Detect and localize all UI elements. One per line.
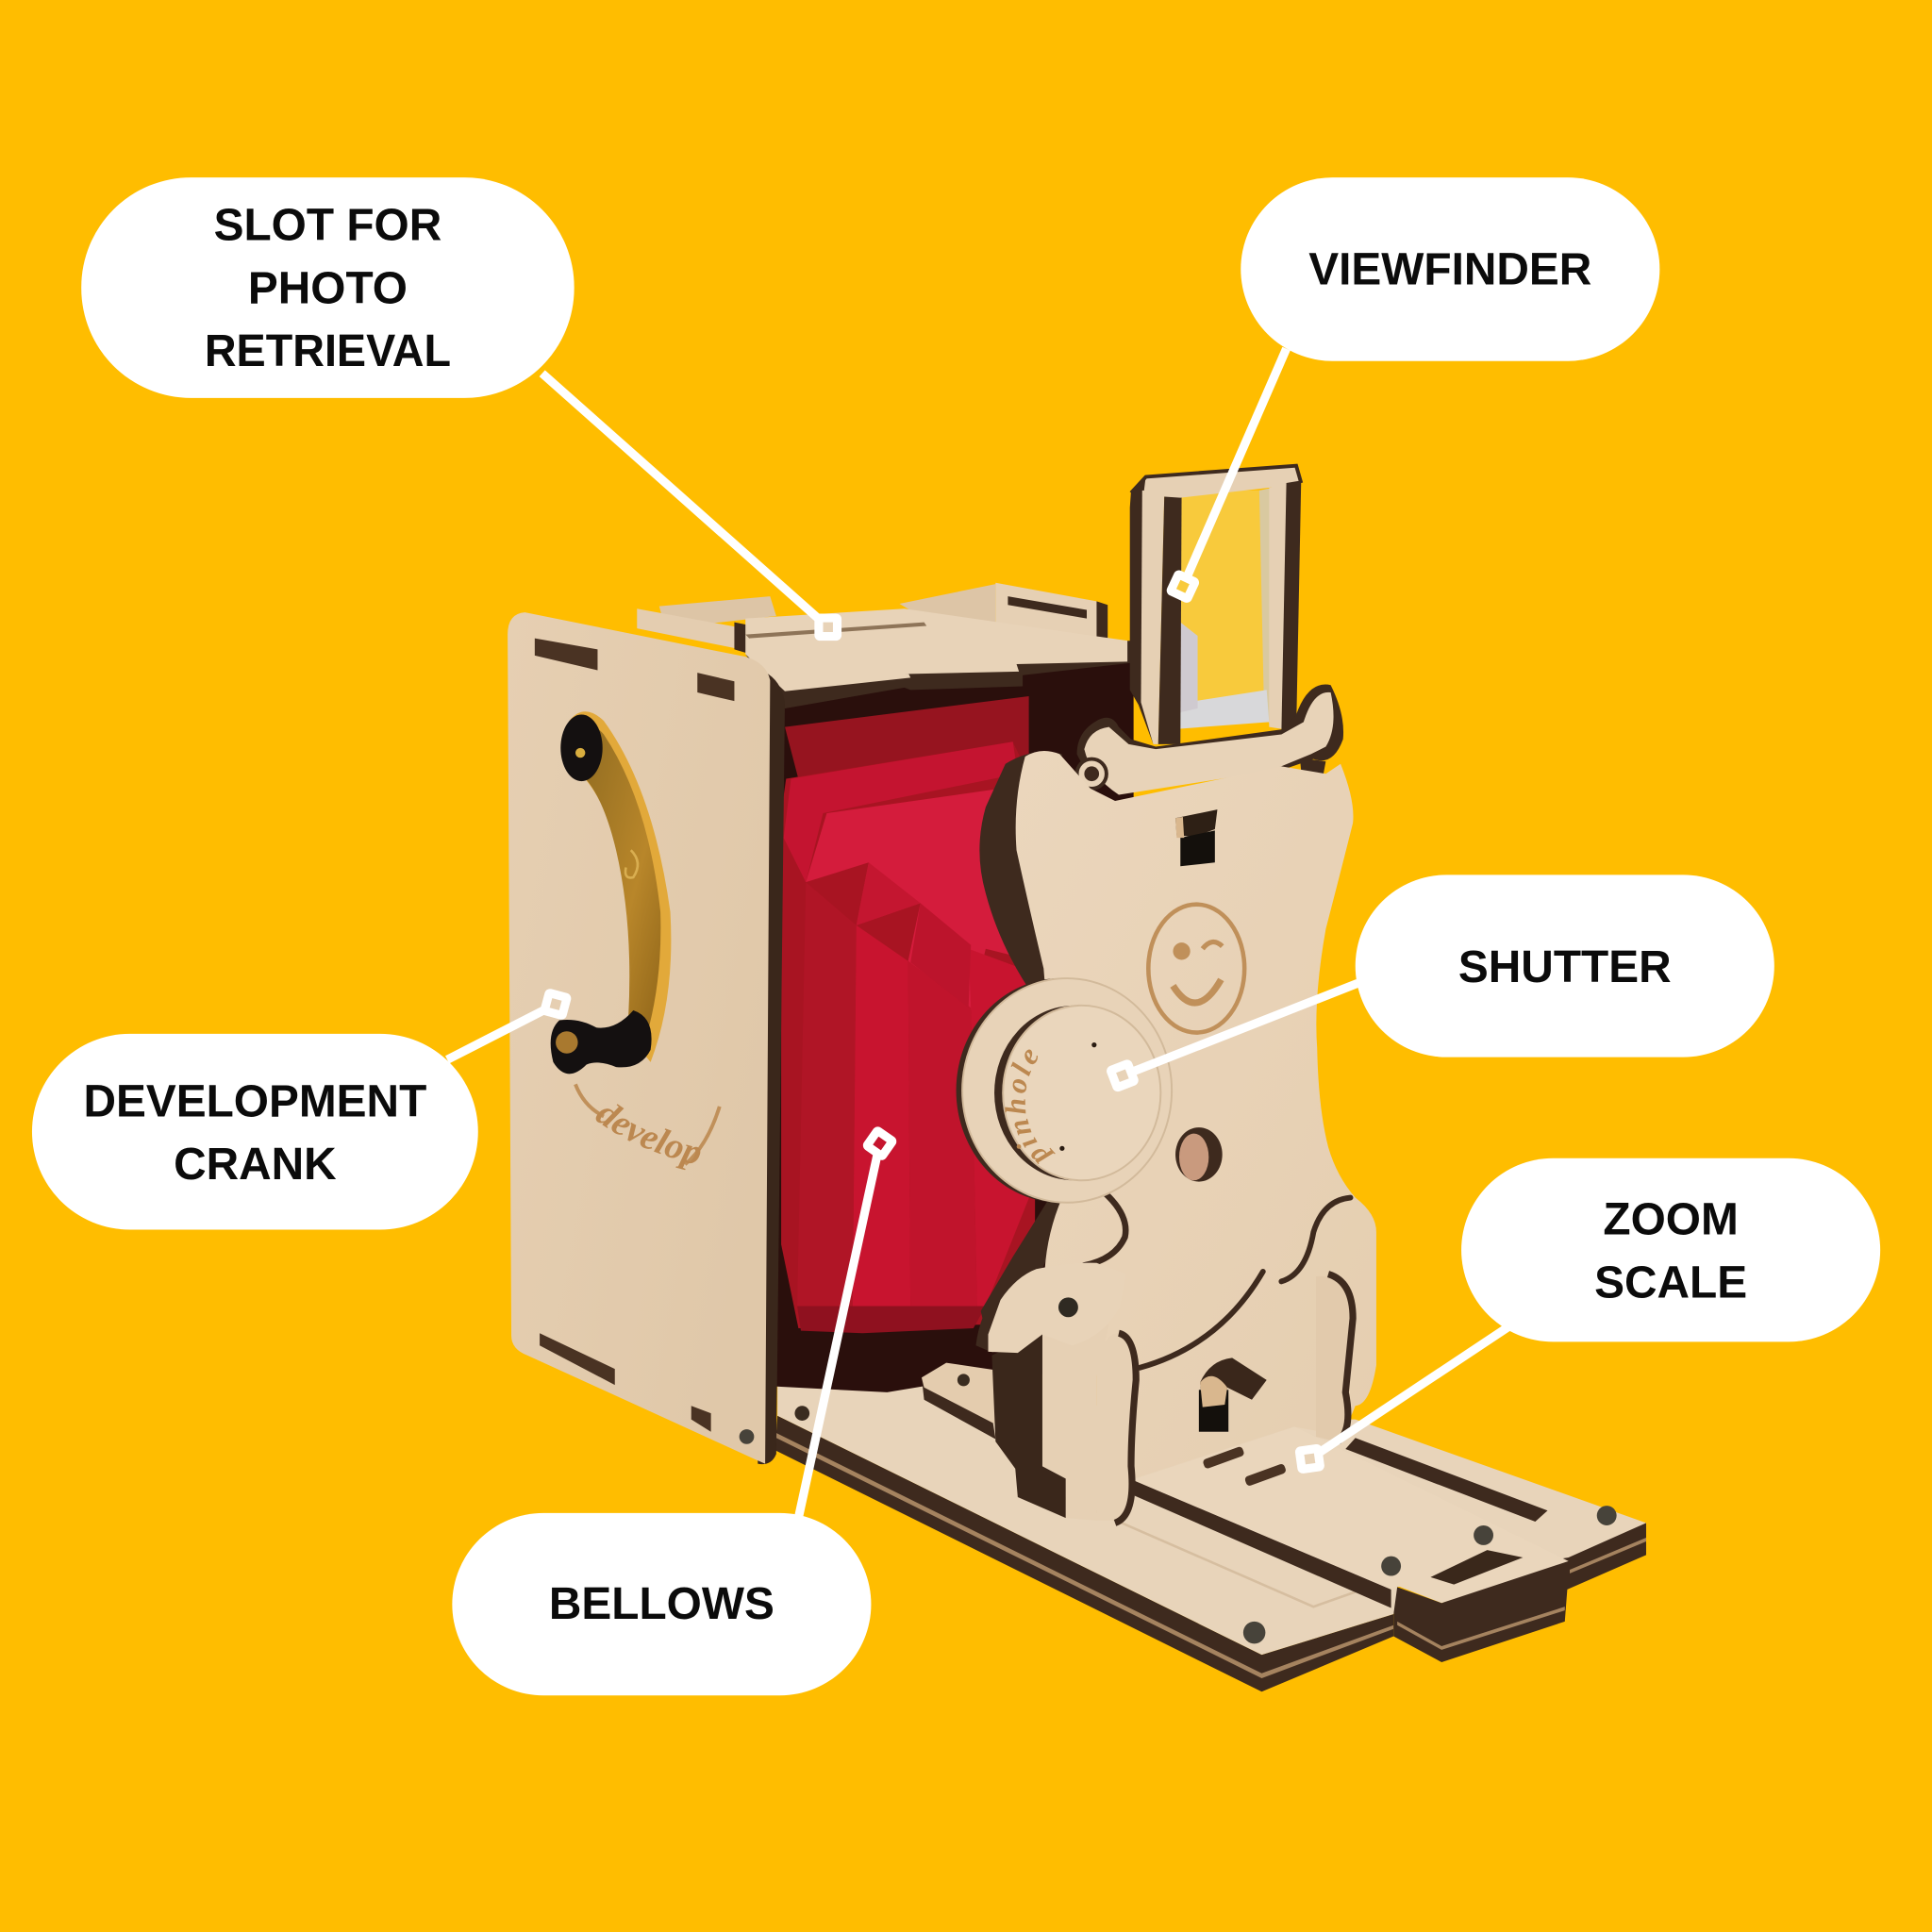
viewfinder top bar (1143, 466, 1301, 498)
smiley engraving (1148, 905, 1244, 1033)
viewfinder right post (1269, 483, 1289, 729)
shutter window slot (1175, 809, 1217, 866)
bellows (781, 696, 1035, 1333)
callout: slot for photo retrieval (81, 177, 838, 637)
callout: development crank: CRANK (174, 1140, 337, 1190)
camera illustration (508, 464, 1646, 1692)
callout: bellows (452, 1130, 892, 1695)
bone crossbar (1077, 685, 1343, 838)
lower body pieces (991, 1324, 1109, 1521)
pinhole dial (957, 977, 1173, 1204)
base board (775, 1356, 1646, 1691)
engraved develop mark (574, 1083, 722, 1170)
rear tabs (637, 583, 1109, 653)
callout: shutter (1110, 874, 1774, 1088)
zoom slide plate (1132, 1426, 1569, 1607)
aperture hole (1175, 1127, 1223, 1182)
front plate (1016, 751, 1376, 1478)
bird foot piece (975, 1263, 1126, 1353)
pinhole dial: pinhole (1005, 1049, 1056, 1164)
callout: zoom scale (1299, 1158, 1880, 1470)
left upright (1096, 1333, 1136, 1523)
callout: bellows: BELLOWS (549, 1579, 774, 1629)
callout: slot for photo retrieval: SLOT FOR (214, 201, 441, 251)
rear floor block (922, 1363, 995, 1440)
callout: development crank: DEVELOPMENT (83, 1076, 426, 1126)
callout: zoom scale: ZOOM (1603, 1195, 1739, 1245)
front plate dark edge (979, 752, 1070, 1343)
callout: development crank (32, 992, 567, 1230)
focus knob (1199, 1357, 1267, 1432)
callout: viewfinder: VIEWFINDER (1308, 245, 1591, 295)
callout: shutter: SHUTTER (1458, 942, 1672, 992)
interior dark (770, 659, 1134, 1392)
development crank (551, 711, 671, 1074)
viewfinder left post (1130, 478, 1154, 744)
callout: zoom scale: SCALE (1594, 1257, 1747, 1307)
engraved develop mark: develop (596, 1104, 700, 1170)
plate crease lines (1084, 1189, 1351, 1368)
callout: viewfinder (1171, 177, 1659, 599)
viewfinder (1130, 466, 1301, 744)
callout: slot for photo retrieval: RETRIEVAL (205, 326, 451, 376)
callout: slot for photo retrieval: PHOTO (248, 263, 408, 313)
left side panel (508, 612, 785, 1464)
viewfinder glass (1171, 488, 1272, 729)
right upright (1316, 1274, 1353, 1441)
top plate with tabs (637, 583, 1131, 708)
